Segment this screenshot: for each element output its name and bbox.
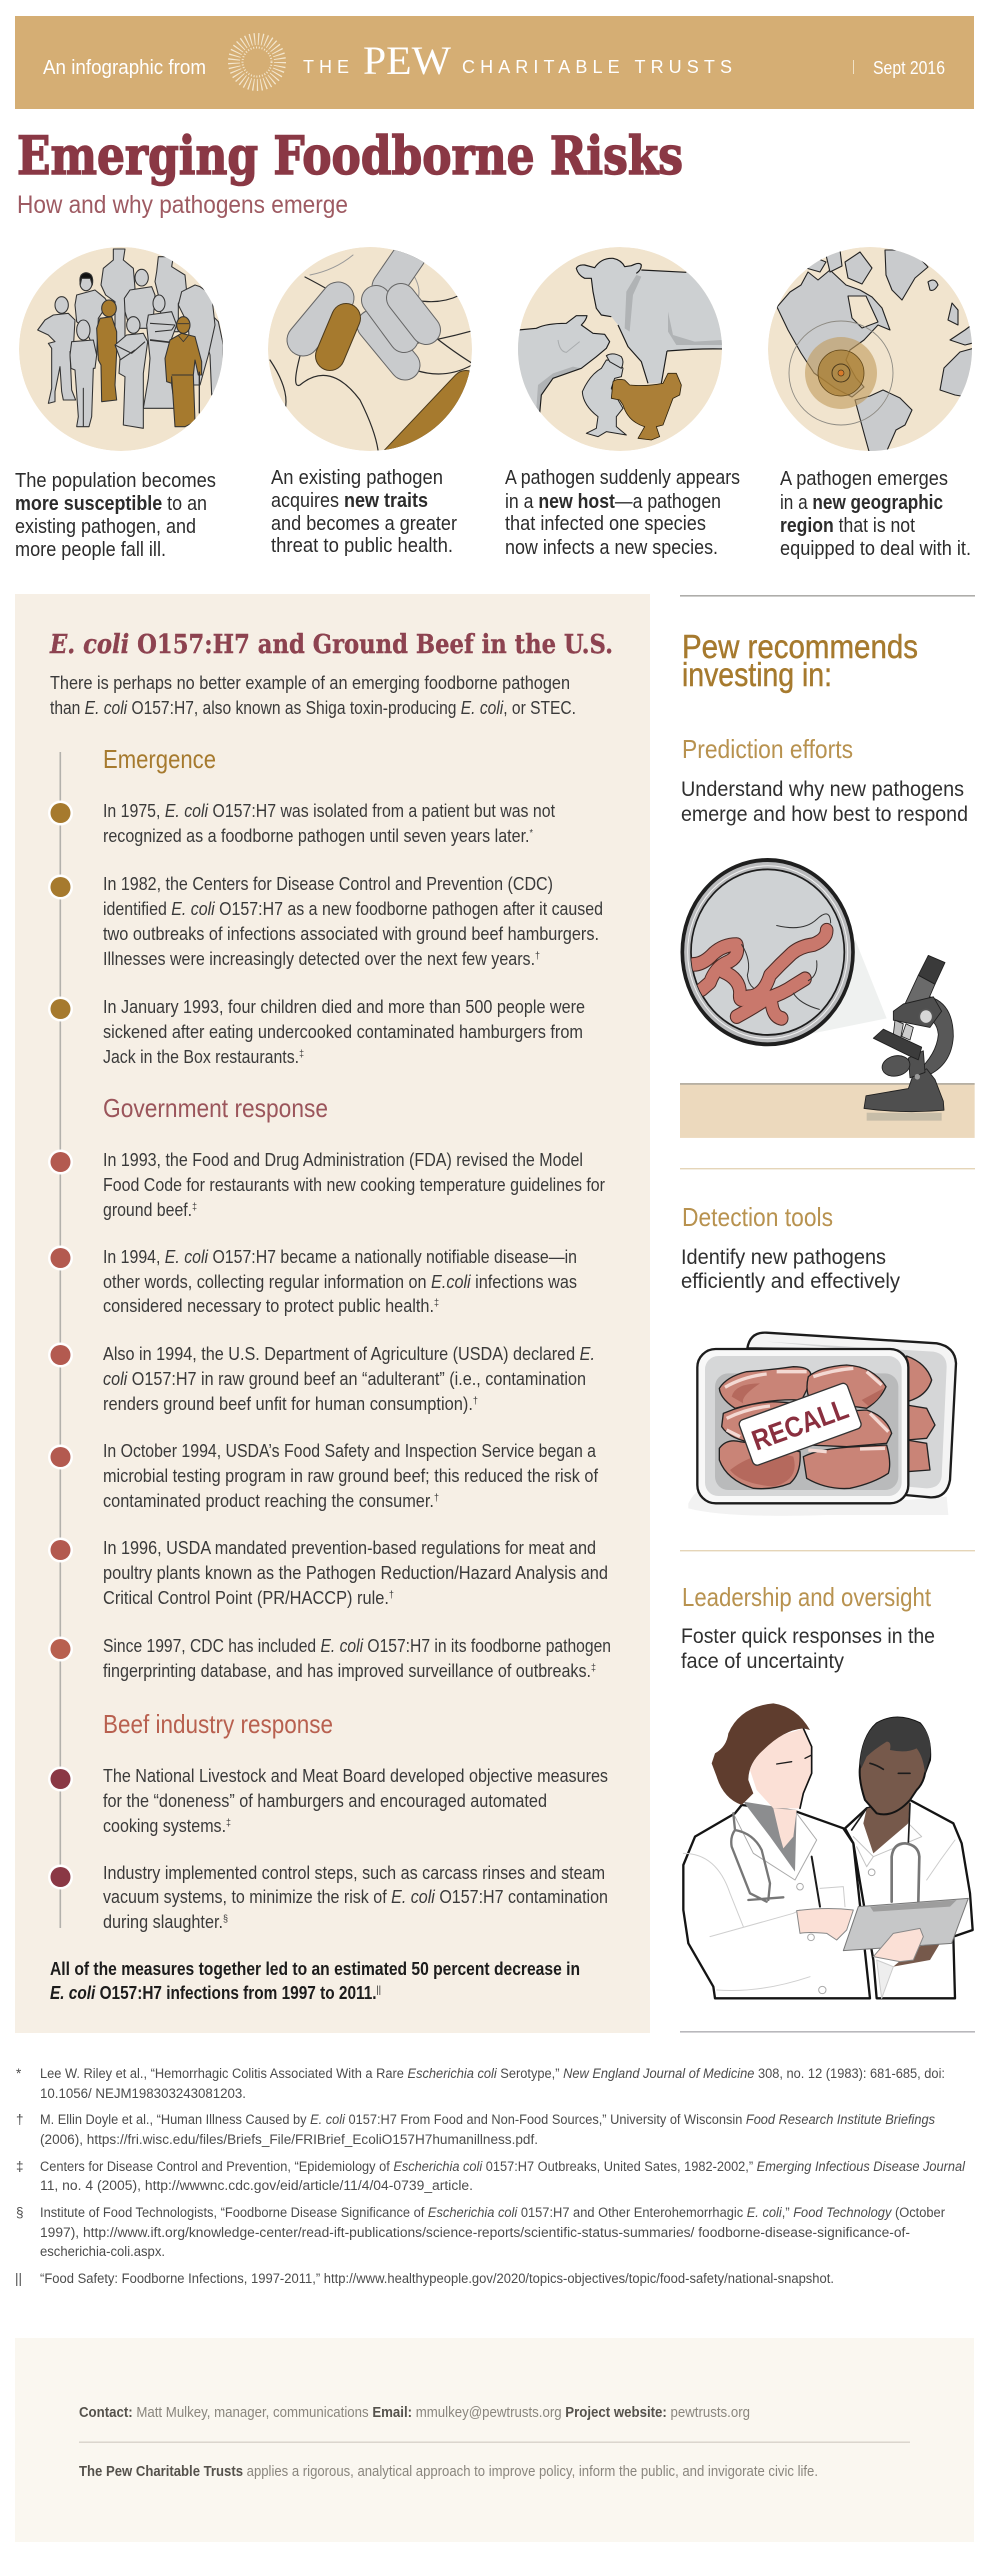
detection text: efficiently and effectively [681,1270,900,1293]
footnotes: § [16,2205,24,2220]
heading: Government response: Government response [103,1093,328,1123]
logo wordmark [303,38,732,83]
event: 1993 FDA: In 1993, the Food and Drug Administration (FDA) revised the Model [103,1150,583,1170]
event: control steps: vacuum systems, to minimize the risk of E. coli O157:H7 contamination [103,1887,608,1907]
detection text: Identify new pathogens [681,1246,886,1269]
footnotes: 1997), http://www.ift.org/knowledge-center/read-ift-publications/science-reports/scientific-status-summaries/ foodborne-disease-significance-of- [40,2225,910,2240]
footnotes: Lee W. Riley et al., “Hemorrhagic Colitis Associated With a Rare Escherichia coli Serotype,” New England Journal of Medicine 308, no. 12 (1983): 681-685, doi: [40,2066,945,2081]
title: Emerging Foodborne Risks [17,126,683,187]
panel: more susceptible population [15,247,223,561]
caption: more susceptible to an [15,493,207,515]
icon: world map with rings [768,244,985,455]
event: October 1994 [48,1441,599,1511]
intro text [50,673,576,718]
event: 1994 adulterant: coli O157:H7 in raw ground beef an “adulterant” (i.e., contamination [103,1369,586,1389]
event: 1975 [48,800,555,846]
caption: more people fall ill. [15,539,166,561]
caption: A pathogen emerges [780,468,948,490]
conclusion: E. coli O157:H7 infections from 1997 to 2011. [50,1983,424,2003]
event: 1997: ‡ [591,1663,596,1674]
logo wordmark: CHARITABLE TRUSTS [462,57,732,77]
event: 1997 [48,1636,611,1681]
event: 1993 FDA: ‡ [192,1202,197,1213]
footnotes: 11, no. 4 (2005), http://wwwnc.cdc.gov/eid/article/11/4/04-0739_article. [40,2178,473,2193]
event: 1993 FDA: Food Code for restaurants with new cooking temperature guidelines for [103,1175,605,1195]
event: 1975: * [530,828,533,839]
conclusion: || [377,1985,381,1996]
event: 1994 adulterant [48,1342,595,1414]
header band [15,16,974,109]
event: 1994 adulterant: Also in 1994, the U.S. Department of Agriculture (USDA) declared E. [103,1344,595,1364]
footnotes: M. Ellin Doyle et al., “Human Illness Caused by E. coli 0157:H7 From Food and Non-Food Sources,” University of Wisconsin Food Research Institute Briefings [40,2112,935,2127]
caption: An existing pathogen [271,467,443,489]
icon: magnified bacteria [682,860,853,1044]
event: 1982: In 1982, the Centers for Disease Control and Prevention (CDC) [103,874,553,894]
event: control steps: § [223,1914,228,1925]
caption: region that is not [780,515,915,537]
footnotes: Centers for Disease Control and Prevention, “Epidemiology of Escherichia coli 0157:H7 Outbreaks, United Sates, 1982-2002,” Emerging Infectious Disease Journal [40,2159,966,2174]
subtitle: How and why pathogens emerge [17,191,348,219]
event: 1982: two outbreaks of infections associated with ground beef hamburgers. [103,924,599,944]
caption: that infected one species [505,513,706,535]
header date: Sept 2016 [873,58,945,78]
event: 1994 notifiable: ‡ [434,1298,439,1309]
event: 1994 notifiable: In 1994, E. coli O157:H7 became a nationally notifiable disease—in [103,1247,577,1267]
leadership text: face of uncertainty [681,1650,844,1673]
event: 1997: fingerprinting database, and has improved surveillance of outbreaks. [103,1661,648,1681]
recommendations heading [682,628,918,693]
event: National Livestock and Meat Board: cooking systems. [103,1816,241,1836]
table surface [680,1083,975,1138]
prediction text: emerge and how best to respond [681,803,968,826]
divider [680,2031,975,2033]
footer panel [15,2338,974,2542]
event: control steps: Industry implemented control steps, such as carcass rinses and steam [103,1863,605,1883]
event: National Livestock and Meat Board [48,1766,608,1836]
footnotes: * [16,2066,22,2081]
panel: new host [505,247,740,559]
icon: two doctors with a tablet [683,1703,973,1998]
header label: An infographic from [43,57,206,79]
heading: Beef industry response: Beef industry response [103,1709,333,1739]
recall label: RECALL [748,1393,853,1457]
leadership text [681,1625,935,1673]
caption: threat to public health. [271,535,453,557]
event: control steps [48,1863,608,1932]
heading: Detection tools: Detection tools [682,1202,833,1232]
event: 1994 notifiable: considered necessary to protect public health. [103,1296,469,1316]
event: 1994 notifiable: other words, collecting regular information on E.coli infections was [103,1272,577,1292]
caption: A pathogen suddenly appears [505,467,740,489]
event: October 1994: contaminated product reaching the consumer. [103,1491,468,1511]
heading: Prediction efforts: Prediction efforts [682,734,853,764]
event: 1975: In 1975, E. coli O157:H7 was isolated from a patient but was not [103,801,555,821]
event: January 1993: Jack in the Box restaurants. [103,1047,325,1067]
event: control steps: during slaughter. [103,1912,236,1932]
caption: now infects a new species. [505,537,718,559]
heading: Leadership and oversight: Leadership and oversight [682,1582,932,1612]
caption: in a new host—a pathogen [505,491,721,513]
event: National Livestock and Meat Board: for the “doneness” of hamburgers and encouraged automated [103,1791,547,1811]
event: 1982: Illnesses were increasingly detected over the next few years. [103,949,587,969]
event: January 1993: ‡ [299,1049,304,1060]
event: 1996: † [389,1590,394,1601]
footnotes: || [15,2271,22,2286]
caption: The population becomes [15,470,216,492]
caption: acquires new traits [271,490,428,512]
event: January 1993: In January 1993, four children died and more than 500 people were [103,997,585,1017]
caption: and becomes a greater [271,513,457,535]
intro text: There is perhaps no better example of an emerging foodborne pathogen [50,673,570,693]
event: National Livestock and Meat Board: ‡ [226,1818,231,1829]
event: October 1994: † [434,1493,439,1504]
heading: Emergence: Emergence [103,744,216,774]
icon: microscope [864,955,953,1121]
footnotes [15,2066,966,2286]
icon: crowd of people [19,247,223,451]
footnotes: 10.1056/ NEJM198303243081203. [40,2086,246,2101]
footnotes: Institute of Food Technologists, “Foodborne Disease Significance of Escherichia coli 0157:H7 and Other Enterohemorrhagic E. coli,” Food Technology (October [40,2205,945,2220]
caption: equipped to deal with it. [780,538,971,560]
panel: E. coli timeline [15,594,650,2033]
event: 1996: In 1996, USDA mandated prevention-based regulations for meat and [103,1538,596,1558]
contact line: Contact: Matt Mulkey, manager, communications Email: mmulkey@pewtrusts.org Project website: pewtrusts.org [79,2405,750,2421]
event: January 1993 [48,996,585,1067]
caption: in a new geographic [780,492,943,514]
conclusion [50,1959,580,2003]
event: October 1994: In October 1994, USDA’s Food Safety and Inspection Service began a [103,1441,597,1461]
event: 1994 adulterant: renders ground beef unfit for human consumption). [103,1394,508,1414]
footnotes: escherichia-coli.aspx. [40,2244,165,2259]
event: 1997: Since 1997, CDC has included E. coli O157:H7 in its foodborne pathogen [103,1636,611,1656]
timeline line [60,752,61,1928]
divider [680,1168,975,1169]
event: 1994 adulterant: † [473,1396,478,1407]
panel: new traits [268,247,475,557]
icon: bacteria [268,247,475,460]
divider [680,1550,975,1551]
event: National Livestock and Meat Board: The National Livestock and Meat Board developed objective measures [103,1766,608,1786]
recommendations heading: investing in: [682,656,832,693]
leadership text: Foster quick responses in the [681,1625,935,1648]
caption [15,470,216,561]
panel: Pew recommends [680,595,975,2033]
footnotes: † [16,2112,24,2127]
intro text: than E. coli O157:H7, also known as Shiga toxin-producing E. coli, or STEC. [50,698,576,718]
icon: Pew sunburst logo [234,39,280,85]
logo wordmark: THE [303,57,349,77]
footnotes: ‡ [16,2159,24,2174]
prediction text: Understand why new pathogens [681,778,964,801]
caption [271,467,457,557]
detection text [681,1246,900,1293]
event: 1982 [48,874,603,969]
caption: existing pathogen, and [15,516,196,538]
caption [505,467,740,559]
event: 1982: † [535,951,540,962]
conclusion: All of the measures together led to an estimated 50 percent decrease in [50,1959,580,1979]
footnotes: “Food Safety: Foodborne Infections, 1997-2011,” http://www.healthypeople.gov/2020/topics-objectives/topic/food-safety/national-snapshot. [40,2271,834,2286]
prediction text [681,778,968,826]
about line: The Pew Charitable Trusts applies a rigorous, analytical approach to improve policy, inform the public, and invigorate civic life. [79,2464,818,2480]
icon: cow, pig and chickens [513,247,730,451]
event: January 1993: sickened after eating undercooked contaminated hamburgers from [103,1022,583,1042]
event: 1993 FDA [48,1150,605,1220]
light beam [807,939,887,1035]
event: 1993 FDA: ground beef. [103,1200,204,1220]
footnotes: (2006), https://fri.wisc.edu/files/Briefs_File/FRIBrief_EcoliO157H7humanillness.pdf. [40,2132,538,2147]
caption [780,468,971,560]
logo wordmark: PEW [363,38,451,83]
event: 1996: poultry plants known as the Pathogen Reduction/Hazard Analysis and [103,1563,608,1583]
recommendations heading: Pew recommends [682,628,918,665]
event: 1996 [48,1538,608,1608]
event: 1994 notifiable [48,1246,577,1316]
microscope illustration [680,860,975,1138]
event: 1975: recognized as a foodborne pathogen until seven years later. [103,826,580,846]
panel heading: E. coli O157:H7 and Ground Beef in the U.S. [49,629,613,660]
icon: recalled meat trays [688,1333,956,1516]
panel: new geographic region [768,244,985,560]
event: October 1994: microbial testing program in raw ground beef; this reduced the risk of [103,1466,599,1486]
event: 1996: Critical Control Point (PR/HACCP) rule. [103,1588,417,1608]
event: 1982: identified E. coli O157:H7 as a new foodborne pathogen after it caused [103,899,603,919]
